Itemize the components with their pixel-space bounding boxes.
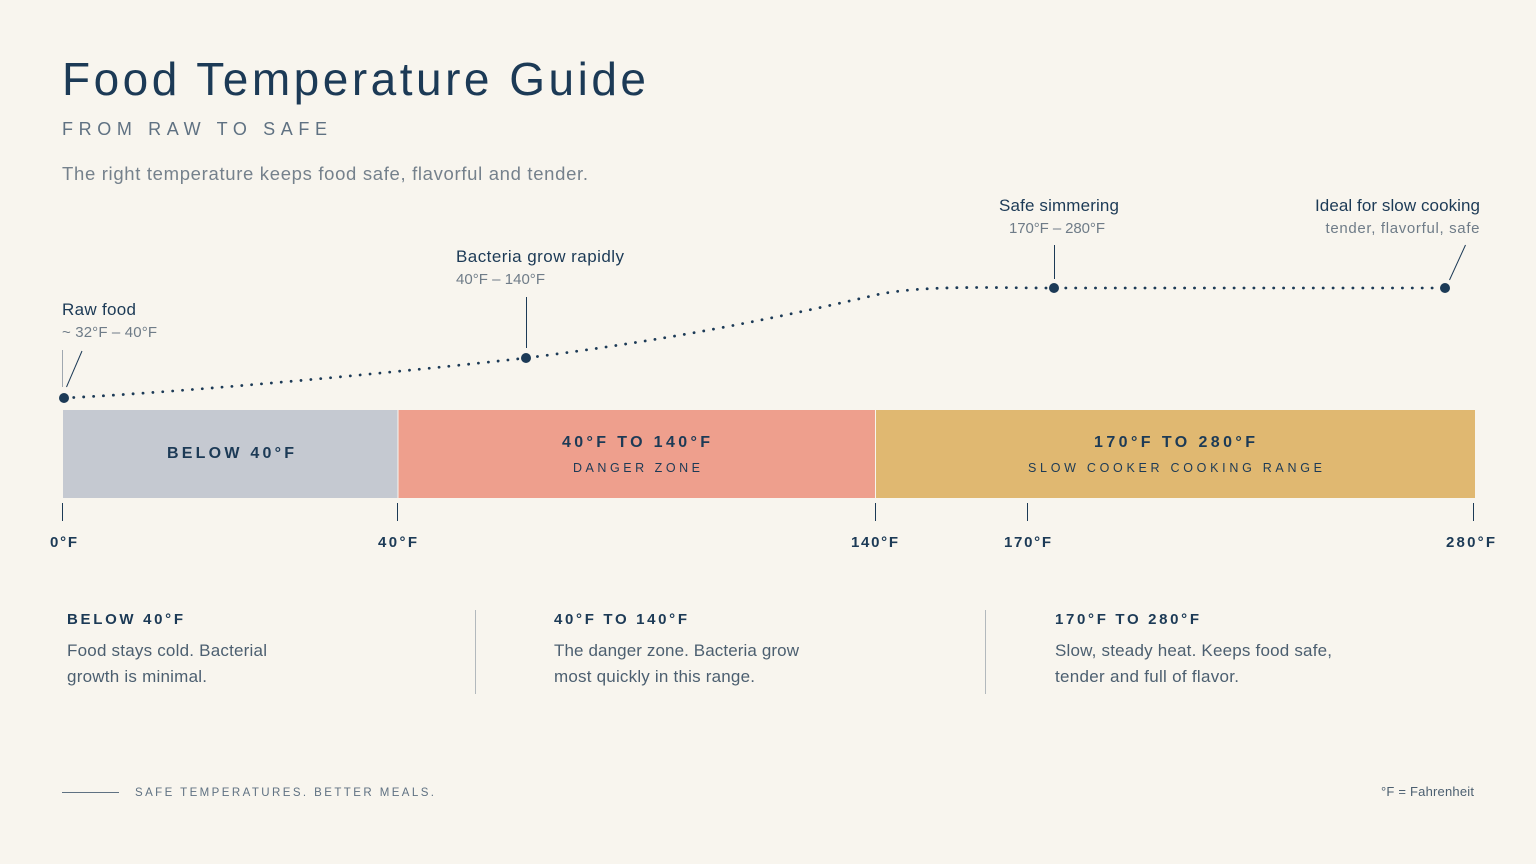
callout: raw food: Raw food xyxy=(62,300,136,319)
temperature axis: 40°F xyxy=(378,534,417,551)
segment: slow cooker range xyxy=(876,410,1475,498)
description: below 40: Food stays cold. Bacterial xyxy=(67,641,267,660)
description: below 40: growth is minimal. xyxy=(67,667,207,686)
temperature curve xyxy=(59,283,1450,403)
callout: bacteria: Bacteria grow rapidly xyxy=(456,247,624,266)
callout: bacteria: 40°F – 140°F xyxy=(456,271,545,288)
description: slow cooker range: 170°F TO 280°F xyxy=(1055,611,1199,628)
description: slow cooker range: tender and full of flavor. xyxy=(1055,667,1239,686)
description: danger zone: most quickly in this range. xyxy=(554,667,755,686)
callout: slow cooking: tender, flavorful, safe xyxy=(1326,220,1480,237)
callout: bacteria xyxy=(456,247,624,348)
title: Food Temperature Guide xyxy=(62,53,646,105)
description: danger zone xyxy=(554,611,800,686)
description: below 40: BELOW 40°F xyxy=(67,611,183,628)
temperature axis: 280°F xyxy=(1446,534,1495,551)
segment: slow cooker range: 170°F TO 280°F xyxy=(1094,434,1255,451)
callout: slow cooking xyxy=(1315,196,1480,280)
segment: below 40: BELOW 40°F xyxy=(167,445,294,462)
temperature bar xyxy=(63,410,1475,498)
intro text: The right temperature keeps food safe, flavorful and tender. xyxy=(62,163,588,184)
callout: raw food: ~ 32°F – 40°F xyxy=(62,324,157,341)
description: slow cooker range: Slow, steady heat. Keeps food safe, xyxy=(1055,641,1332,660)
segment: danger zone xyxy=(398,410,875,498)
callout: safe simmering xyxy=(999,196,1119,279)
segment: below 40 xyxy=(63,410,398,498)
callout: safe simmering: 170°F – 280°F xyxy=(1009,220,1105,237)
description: below 40 xyxy=(67,611,267,686)
callout: slow cooking: Ideal for slow cooking xyxy=(1315,196,1480,215)
segment: slow cooker range: SLOW COOKER COOKING RANGE xyxy=(1028,461,1322,475)
callout: safe simmering: Safe simmering xyxy=(999,196,1119,215)
description: slow cooker range xyxy=(1055,611,1332,686)
segment: danger zone: DANGER ZONE xyxy=(573,461,700,475)
description: danger zone: 40°F TO 140°F xyxy=(554,611,687,628)
description: danger zone: The danger zone. Bacteria grow xyxy=(554,641,800,660)
temperature axis: 140°F xyxy=(851,534,898,551)
temperature axis: 170°F xyxy=(1004,534,1051,551)
footnote: °F = Fahrenheit xyxy=(1381,784,1474,799)
temperature axis xyxy=(50,503,1495,551)
temperature axis: 0°F xyxy=(50,534,77,551)
callout: raw food xyxy=(62,300,157,387)
footer tagline: SAFE TEMPERATURES. BETTER MEALS. xyxy=(135,787,434,799)
subtitle: FROM RAW TO SAFE xyxy=(62,119,327,139)
segment: danger zone: 40°F TO 140°F xyxy=(562,434,710,451)
